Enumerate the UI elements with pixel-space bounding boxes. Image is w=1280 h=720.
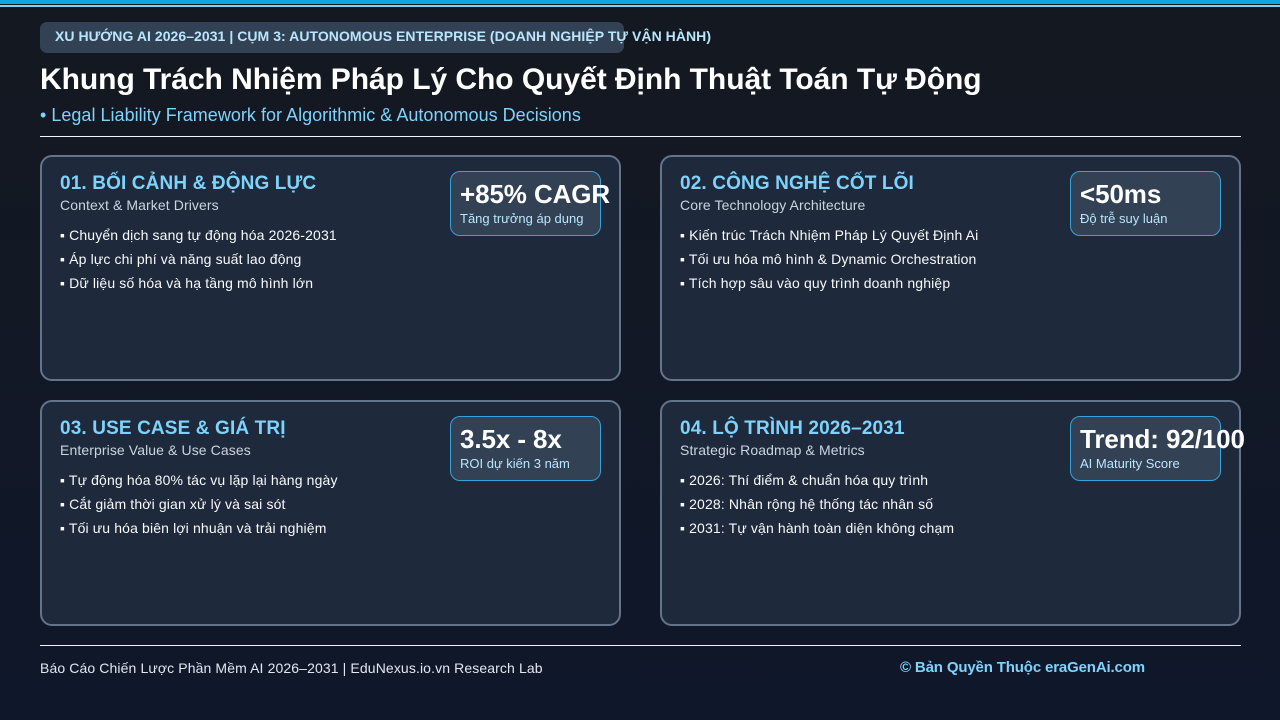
panel subheading: Context & Market Drivers [60,197,219,213]
metric badge: ROI: ROI dự kiến 3 năm [460,456,570,471]
panel heading: 04. LỘ TRÌNH 2026–2031 [680,418,905,439]
top accent bar [0,0,1280,8]
metric badge: CAGR [450,171,601,236]
metric badge: latency [1070,171,1221,236]
metric badge: CAGR: Tăng trưởng áp dụng [460,211,583,226]
bullet list [680,472,954,536]
bullet list: ▪ Kiến trúc Trách Nhiệm Pháp Lý Quyết Định Ai [680,227,978,243]
bullet list: ▪ 2026: Thí điểm & chuẩn hóa quy trình [680,472,928,488]
metric badge: ROI [450,416,601,481]
panel heading: 03. USE CASE & GIÁ TRỊ [60,418,286,439]
title: Khung Trách Nhiệm Pháp Lý Cho Quyết Định Thuật Toán Tự Động [40,63,982,96]
panel subheading: Enterprise Value & Use Cases [60,442,251,458]
panel heading: 02. CÔNG NGHỆ CỐT LÕI [680,173,914,194]
bullet list: ▪ Cắt giảm thời gian xử lý và sai sót [60,496,286,512]
subtitle: • Legal Liability Framework for Algorithmic & Autonomous Decisions [40,105,581,125]
panel: use cases and value [40,400,621,626]
bullet list: ▪ Dữ liệu số hóa và hạ tầng mô hình lớn [60,275,313,291]
panel: core technology [660,155,1241,381]
bullet list [680,227,978,291]
bullet list: ▪ 2031: Tự vận hành toàn diện không chạm [680,520,954,536]
bullet list: ▪ Tích hợp sâu vào quy trình doanh nghiệp [680,275,950,291]
bullet list: ▪ Tối ưu hóa biên lợi nhuận và trải nghiệm [60,520,327,536]
bullet list: ▪ Áp lực chi phí và năng suất lao động [60,251,301,267]
bullet list [60,472,338,536]
panel: context and drivers [40,155,621,381]
metric badge: latency: Độ trễ suy luận [1080,211,1167,226]
footer copyright: © Bản Quyền Thuộc eraGenAi.com [900,659,1145,676]
bullet list: ▪ Tối ưu hóa mô hình & Dynamic Orchestration [680,251,976,267]
metric badge: latency: <50ms [1080,179,1161,209]
panel: roadmap [660,400,1241,626]
panel heading: 01. BỐI CẢNH & ĐỘNG LỰC [60,173,316,194]
category tag [40,22,624,53]
metric badge: trend score [1070,416,1221,481]
footer source: Báo Cáo Chiến Lược Phần Mềm AI 2026–2031 | EduNexus.io.vn Research Lab [40,660,543,676]
bullet list: ▪ 2028: Nhân rộng hệ thống tác nhân số [680,496,933,512]
metric badge: trend score: AI Maturity Score [1080,456,1180,471]
bullet list [60,227,337,291]
bullet list: ▪ Chuyển dịch sang tự động hóa 2026-2031 [60,227,337,243]
metric badge: ROI: 3.5x - 8x [460,424,562,454]
category tag text: XU HƯỚNG AI 2026–2031 | CỤM 3: AUTONOMOUS ENTERPRISE (DOANH NGHIỆP TỰ VẬN HÀNH) [55,28,711,44]
panel subheading: Core Technology Architecture [680,197,865,213]
bullet list: ▪ Tự động hóa 80% tác vụ lặp lại hàng ngày [60,472,338,488]
panel subheading: Strategic Roadmap & Metrics [680,442,865,458]
metric badge: trend score: Trend: 92/100 [1080,424,1245,454]
metric badge: CAGR: +85% CAGR [460,179,610,209]
